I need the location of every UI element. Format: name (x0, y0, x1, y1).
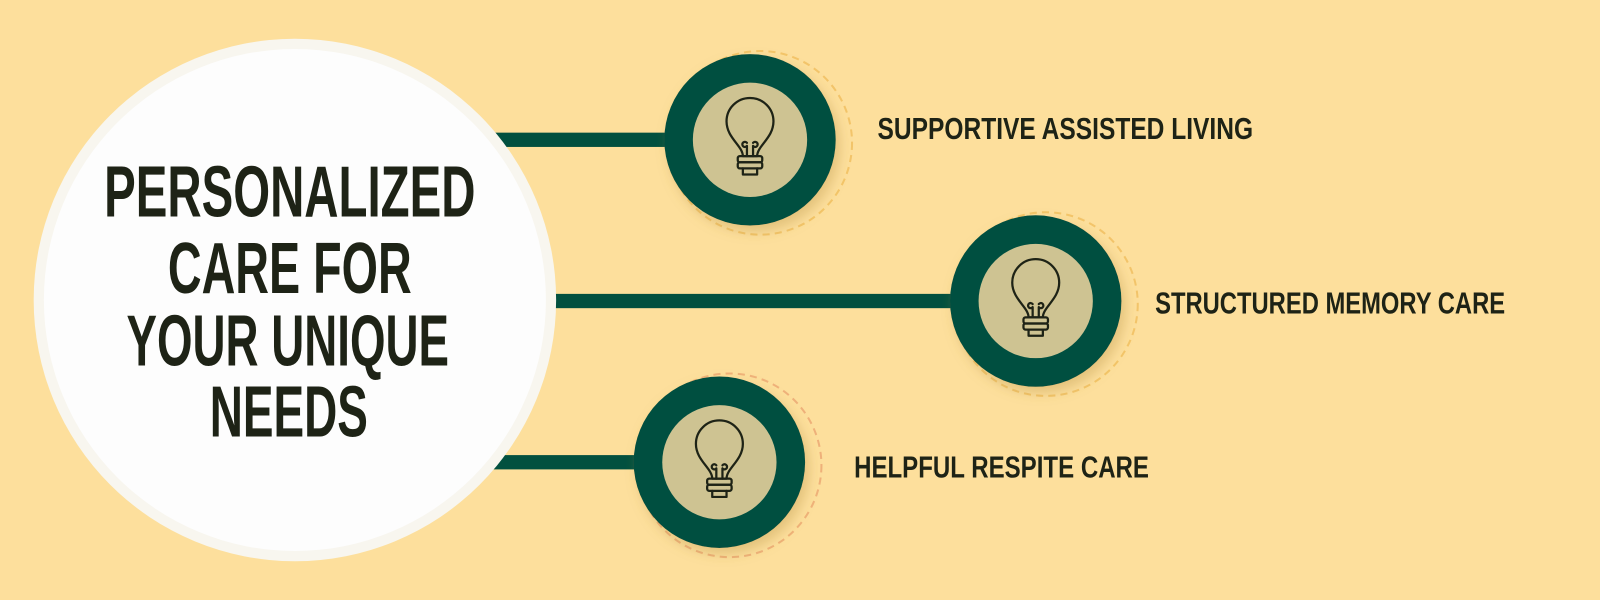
item 1: supportive assisted living: SUPPORTIVE ASSISTED LIVING (878, 112, 1253, 146)
title (104, 151, 476, 453)
item 2: structured memory care: STRUCTURED MEMORY CARE (1155, 286, 1505, 320)
item 1: supportive assisted living (664, 51, 1253, 235)
icon: bulb (1012, 259, 1059, 336)
title: YOUR UNIQUE (127, 300, 449, 381)
item 2: structured memory care (950, 212, 1505, 396)
main circle with title (34, 39, 556, 561)
item 3: helpful respite care: HELPFUL RESPITE CARE (854, 451, 1149, 485)
title: NEEDS (210, 372, 368, 453)
item 3: helpful respite care (634, 373, 1149, 557)
icon: bulb (727, 98, 773, 174)
title: PERSONALIZED (104, 151, 476, 232)
icon: bulb (696, 420, 743, 497)
connector lines (490, 133, 964, 469)
title: CARE FOR (168, 228, 412, 309)
